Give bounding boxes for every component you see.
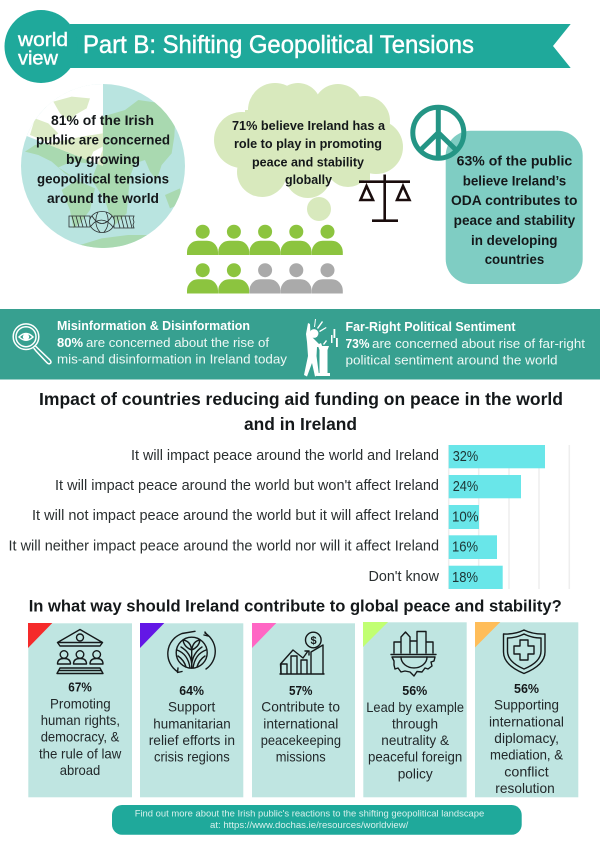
- globe text: geopolitical tensions: [37, 172, 169, 186]
- people pictogram 7 of 10: [187, 225, 343, 294]
- box text: countries: [485, 252, 544, 267]
- header banner: [4, 10, 571, 83]
- panel: globe statistic: [21, 84, 185, 252]
- icon: peace sign: [413, 107, 464, 158]
- panel: card 3 peacekeeping: [252, 623, 355, 797]
- card text: relief efforts in: [149, 732, 235, 748]
- box text: [451, 154, 578, 267]
- bar values: 16%: [452, 538, 478, 556]
- box text: believe Ireland’s: [463, 174, 566, 188]
- globe text: public are concerned: [36, 132, 170, 148]
- title: Part B: Shifting Geopolitical Tensions: [83, 31, 474, 59]
- card text: Supporting: [494, 697, 559, 713]
- row 1 people: [187, 225, 343, 255]
- card text: international: [489, 713, 564, 729]
- card text: abroad: [60, 762, 100, 778]
- bar labels: It will not impact peace around the world but it will affect Ireland: [32, 508, 439, 524]
- world view logo: view: [18, 48, 58, 70]
- card text: diplomacy,: [494, 730, 559, 746]
- bar chart: [8, 445, 569, 589]
- card text: humanitarian: [153, 715, 231, 731]
- misinformation text: are concerned about the rise of: [86, 335, 269, 350]
- bar labels: It will neither impact peace around the world nor will it affect Ireland: [8, 538, 439, 554]
- icon: growth chart with dollar coin: [280, 632, 324, 674]
- panel: thought cloud statistic: [187, 83, 410, 294]
- card text: mediation, &: [490, 747, 564, 763]
- cloud text: role to play in promoting: [234, 136, 382, 151]
- card text: peaceful foreign: [368, 749, 462, 765]
- cloud text: globally: [285, 172, 333, 187]
- bar labels: It will impact peace around the world and Ireland: [131, 448, 439, 464]
- row 2 people: [187, 263, 343, 294]
- bar labels: It will impact peace around the world but won't affect Ireland: [55, 478, 439, 494]
- bar values: 24%: [453, 478, 478, 495]
- card text: [489, 681, 564, 796]
- card text: crisis regions: [154, 749, 230, 765]
- globe text: [36, 113, 170, 206]
- chart heading: Impact of countries reducing aid funding on peace in the world: [39, 389, 563, 409]
- far-right text: are concerned about rise of far-right: [372, 336, 585, 351]
- icon: speaker at podium: [304, 319, 338, 376]
- bar labels: [8, 448, 440, 585]
- card text: policy: [398, 765, 433, 781]
- card text: through: [392, 716, 438, 732]
- section heading: In what way should Ireland contribute to global peace and stability?: [29, 596, 562, 616]
- world view logo: [4, 10, 78, 83]
- bar values: [452, 448, 478, 586]
- card text: conflict: [504, 763, 549, 779]
- cloud text: 71% believe Ireland has a: [232, 118, 386, 133]
- card text: Contribute to: [261, 699, 340, 715]
- cloud text: [232, 118, 386, 187]
- panel: concern band: [0, 309, 600, 380]
- cloud text: peace and stability: [252, 154, 365, 170]
- far-right text: political sentiment around the world: [346, 352, 558, 368]
- title ribbon: [70, 24, 571, 68]
- box text: 63% of the public: [457, 154, 573, 169]
- world view logo: world: [17, 30, 68, 51]
- icon: plant in circle: [168, 631, 215, 672]
- panel: card 2 humanitarian relief: [140, 623, 243, 797]
- card text: international: [263, 715, 338, 731]
- panel: card 1 human rights: [28, 623, 132, 797]
- box text: peace and stability: [454, 213, 576, 228]
- card text: 57%: [289, 683, 313, 698]
- globe text: around the world: [47, 191, 159, 206]
- card text: the rule of law: [39, 745, 122, 761]
- bars: [449, 445, 545, 589]
- misinformation text: mis-and disinformation in Ireland today: [57, 352, 288, 366]
- panel: card 4 neutrality: [363, 622, 467, 797]
- far-right text: Far-Right Political Sentiment: [346, 320, 516, 334]
- card text: missions: [276, 749, 326, 765]
- icon: scales of justice: [359, 174, 410, 221]
- card text: resolution: [495, 780, 555, 796]
- far-right text: 73%: [346, 337, 370, 351]
- card text: 64%: [179, 683, 204, 698]
- card text: human rights,: [41, 712, 120, 728]
- footer call to action: at: https://www.dochas.ie/resources/worldview/: [210, 820, 409, 831]
- chart heading: [39, 389, 563, 434]
- box text: ODA contributes to: [451, 193, 578, 208]
- icon: shield with cross: [504, 630, 545, 674]
- bar values: 32%: [453, 448, 478, 465]
- bar values: 18%: [452, 569, 478, 586]
- panel: card 5 diplomacy: [475, 622, 578, 797]
- icon: magnifier with eye: [13, 324, 51, 364]
- card text: Lead by example: [366, 699, 464, 715]
- card text: [366, 683, 464, 781]
- card text: neutrality &: [381, 732, 450, 748]
- card text: democracy, &: [41, 729, 120, 745]
- card text: [39, 680, 122, 778]
- teal rounded box: [446, 131, 583, 284]
- card text: Support: [168, 699, 215, 715]
- far-right text: [346, 320, 585, 368]
- bar labels: Don't know: [368, 569, 440, 585]
- misinformation text: 80%: [57, 336, 83, 350]
- globe text: 81% of the Irish: [51, 113, 154, 128]
- panel: card 3 peacekeeping: $: [310, 635, 317, 647]
- card text: Promoting: [50, 695, 111, 711]
- thought cloud: [214, 83, 403, 221]
- card text: 67%: [68, 680, 92, 694]
- bar values: 10%: [452, 508, 478, 526]
- footer call to action: [112, 805, 522, 835]
- card text: 56%: [402, 683, 428, 698]
- globe text: by growing: [66, 152, 140, 167]
- footer call to action: Find out more about the Irish public's reactions to the shifting geopolitical landscape: [135, 808, 484, 820]
- card text: peacekeeping: [261, 732, 341, 748]
- icon: city on gear: [391, 632, 436, 676]
- band background: [0, 309, 600, 380]
- misinformation text: [57, 319, 288, 366]
- box text: in developing: [471, 233, 558, 248]
- card text: [261, 683, 341, 765]
- icon: institution with people: [57, 630, 103, 674]
- misinformation text: Misinformation & Disinformation: [57, 319, 250, 333]
- icon: knotted rope: [69, 212, 134, 232]
- globe pie chart 81%: [21, 84, 185, 252]
- chart heading: and in Ireland: [244, 414, 357, 434]
- card text: 56%: [514, 681, 539, 696]
- panel: ODA statistic: [413, 107, 583, 284]
- card text: [149, 683, 235, 765]
